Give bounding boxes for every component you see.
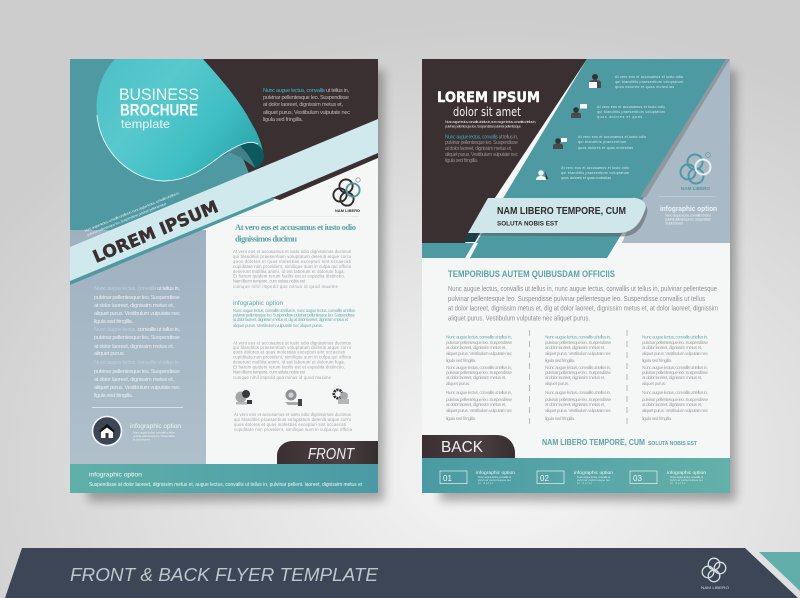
icon: person at desk: [589, 74, 601, 88]
brochure title: template: [121, 117, 170, 131]
gray right area: [622, 59, 730, 243]
column 1: pulvinar pellentesque leo. Suspendisse: [446, 370, 512, 375]
column 1: aliquet purus.: [446, 381, 470, 386]
back headline: LOREM IPSUM: [437, 90, 540, 106]
dark panel paragraph: ligula sed fringilla.: [445, 158, 478, 164]
icon: person with speech bubble 1: [571, 104, 587, 118]
column 3: at dolor laoreet, dignissim metus et,: [642, 375, 702, 380]
panel: front page: [70, 59, 378, 493]
left column text: Nunc augue lectus, convallis ut tellus in,: [94, 360, 180, 366]
front tab: [277, 441, 378, 464]
column 1: ligula sed fringilla.: [446, 416, 476, 421]
left column text: aliquet purus. Vestibulum vulputate nec: [94, 311, 180, 317]
dark panel text: at dolor laoreet, dignissim metus et,: [263, 102, 343, 108]
back tab: BACK: [441, 439, 484, 456]
logo: Nam Libero: [333, 178, 360, 213]
dark panel paragraph: [445, 134, 518, 164]
left column text: aliquet purus. Vestibulum vulputate nec: [94, 385, 180, 391]
left column infographic option: pulvinar pellentesque leo. Suspendisse: [133, 434, 175, 438]
teal top area: [70, 59, 270, 250]
list text 1: At vero eos et accusamus et iusto odio: [615, 75, 683, 79]
list text 3: quos dolores et quas molestias: [578, 146, 633, 150]
paragraph 3: qui blanditiis praesentium voluptatum deleniti atque corru: [234, 417, 352, 422]
column 2: at dolor laoreet, dignissim metus et,: [545, 345, 605, 350]
left column infographic option: [130, 423, 181, 442]
list text 4: qui blanditiis praesentium voluptatum: [561, 171, 629, 175]
footer item 02: 02: [540, 474, 549, 483]
footer item 01: pulvinar pellentesque leo: [478, 478, 511, 482]
footer item 02: at dolor: [577, 481, 592, 485]
icon: coins and person: [236, 390, 252, 404]
dark panel text: pulvinar pellentesque leo. Suspendisse: [263, 95, 349, 101]
gray panel infographic option: at dolor laoreet: [665, 222, 683, 226]
column 3: at dolor laoreet, dignissim metus et,: [642, 345, 702, 350]
icon: coin in hand: [285, 390, 302, 406]
gray panel infographic option: infographic option: [660, 206, 717, 213]
column 2: at dolor laoreet, dignissim metus et,: [545, 402, 605, 407]
paragraph 2: [233, 340, 352, 380]
infographic option block: pulvinar pellentesque leo. Suspendisse pulvinar pellentesque leo. Suspendisse: [233, 312, 356, 318]
paragraph 1: At vero eos et accusamus et iusto odio dignissimos ducimus: [233, 249, 351, 254]
column 2: aliquet purus. Vestibulum vulputate nec: [545, 408, 612, 413]
list text 2: [597, 105, 665, 119]
footer item 01: infographic option: [476, 470, 516, 475]
list text 3: At vero eos et accusamus et iusto odio: [578, 135, 646, 139]
back headline: Nunc augue lectus, convallis ut tellus in, nunc augue lectus, convallis ut tellus in,: [445, 120, 536, 124]
list text 2: At vero eos et accusamus et iusto odio: [597, 105, 665, 109]
footer item 02: pulvinar pellentesque leo: [577, 478, 610, 482]
column 3: pulvinar pellentesque leo. Suspendisse: [642, 370, 708, 375]
column 2: aliquet purus.: [545, 381, 569, 386]
panel: back page: [422, 59, 730, 493]
right heading: [235, 222, 356, 244]
column 2: Nunc augue lectus, convallis ut tellus in,: [545, 365, 611, 370]
column 3: ligula sed fringilla.: [642, 358, 672, 363]
column 3: ligula sed fringilla.: [642, 416, 672, 421]
paragraph 1: deserunt mollitia animi, id est laborum et dolorum fuga.: [233, 269, 345, 274]
footer item 03: [630, 470, 707, 485]
logo: Nam Libero teal: [680, 153, 710, 191]
back tab: [422, 435, 515, 458]
column 2: [545, 334, 612, 421]
footer tagline: SOLUTA NOBIS EST: [648, 441, 697, 447]
dark panel paragraph: at dolor laoreet, dignissim metus et,: [445, 146, 512, 152]
brochure title: BROCHURE: [120, 100, 198, 120]
column 2: pulvinar pellentesque leo. Suspendisse: [545, 370, 611, 375]
paragraph 3: [234, 412, 353, 432]
left column text: at dolor laoreet, dignissim metus et,: [94, 344, 174, 350]
white stripe: [465, 243, 478, 258]
left column text: at dolor laoreet, dignissim metus et,: [94, 303, 174, 309]
back headline: [437, 90, 540, 128]
column 3: at dolor laoreet, dignissim metus et,: [642, 402, 702, 407]
column 3: [642, 334, 709, 421]
back headline: dolor sit amet: [453, 105, 521, 119]
back heading: TEMPORIBUS AUTEM QUIBUSDAM OFFICIIS: [448, 269, 615, 279]
column 2: pulvinar pellentesque leo. Suspendisse: [545, 397, 611, 402]
infographic option block: aliquet purus. Vestibulum vulputate nec aliquet purus.: [233, 323, 323, 328]
page shadows: [88, 70, 736, 501]
footer item 03: infographic option: [667, 470, 707, 475]
footer item 03: 03: [633, 474, 642, 483]
gray panel infographic option: pulvinar pellentesque leo. Suspendisse: [665, 218, 711, 222]
column 3: pulvinar pellentesque leo. Suspendisse: [642, 340, 708, 345]
footer item 02: infographic option: [574, 470, 614, 475]
paragraph 2: cupiditate non provident, similique sunt in culpa qui officia: [233, 354, 352, 360]
column 1: pulvinar pellentesque leo. Suspendisse: [446, 397, 512, 402]
dark panel paragraph: aliquet purus. Vestibulum vulputate nec: [445, 152, 518, 158]
front footer bar: Suspendisse at dolor laoreet, dignissim metus et, augue lectus, convallis ut tellus in, pulvinar pellent. laoreet, dignissim metus et: [89, 482, 362, 488]
column 2: pulvinar pellentesque leo. Suspendisse: [545, 340, 611, 345]
paragraph 2: Et harum quidem rerum facilis est et expedita distinctio.: [233, 364, 345, 370]
icon: person with speech bubble 2: [553, 138, 567, 149]
paragraph 1: quos dolores et quas molestias excepturi sint occaecati: [233, 259, 351, 264]
right heading: dignissimos ducimu: [235, 234, 297, 244]
ribbon: NAM LIBERO TEMPORE, CUM: [497, 205, 626, 217]
back intro paragraph: aliquet purus. Vestibulum vulputate nec aliquet purus.: [448, 314, 590, 322]
column 2: Nunc augue lectus, convallis ut tellus in,: [545, 390, 611, 395]
slanted small text: pulvinar pellentesque leo. Suspendisse pulvinar pellentesque: [87, 202, 167, 237]
front tab: FRONT: [308, 446, 355, 463]
column 1: Nunc augue lectus, convallis ut tellus in,: [446, 390, 512, 395]
paragraph 1: Et harum quidem rerum facilis est et expedita distinctio.: [233, 274, 345, 278]
column 2: at dolor laoreet, dignissim metus et,: [545, 375, 605, 380]
column 3: aliquet purus. Vestibulum vulputate nec: [642, 351, 709, 356]
footer item 01: [440, 470, 516, 485]
column 1: at dolor laoreet, dignissim metus et,: [446, 375, 506, 380]
banner logo: NAM LIBERO: [701, 586, 729, 590]
list text 3: [578, 135, 646, 150]
infographic option block: infographic option: [233, 300, 284, 307]
paragraph 1: cumque nihil impedit quo minus id quod maxime: [233, 284, 339, 289]
band headline: LOREM IPSUM: [90, 197, 221, 268]
left column infographic option: at dolor laoreet: [133, 438, 150, 442]
paragraph 1: Nam libero tempore, cum soluta nobis est: [233, 278, 306, 284]
column 1: at dolor laoreet, dignissim metus et,: [446, 402, 506, 407]
dark panel text: aliquet purus. Vestibulum vulputate nec: [263, 110, 350, 116]
front footer bar: [70, 464, 378, 493]
footer item 01: 01: [443, 474, 452, 483]
dark panel text: [263, 88, 350, 123]
column 2: Nunc augue lectus, convallis ut tellus in,: [545, 334, 611, 340]
back headline: pulvinar pellentesque leo. Suspendisse pulvinar pellentesque: [445, 124, 521, 128]
infographic option block: at dolor laoreet, dignissim metus et, dig at dolor laoreet, dignissim metus et: [233, 317, 349, 322]
dark panel paragraph: Nunc augue lectus, convallis ut tellus in,: [445, 134, 518, 140]
list text 4: [561, 166, 629, 180]
dark panel paragraph: pulvinar pellentesque leo. Suspendisse: [445, 140, 518, 146]
dark area: [422, 59, 587, 243]
paragraph 1: cupiditate non provident, similique sunt in culpa qui officia: [233, 264, 352, 269]
column 3: aliquet purus.: [642, 381, 666, 386]
left column text: at dolor laoreet, dignissim metus et,: [94, 377, 174, 383]
column 1: Nunc augue lectus, convallis ut tellus in,: [446, 365, 512, 370]
footer item 02: Nunc augue lectus, convallis ut: [577, 475, 610, 479]
column 1: at dolor laoreet, dignissim metus et,: [446, 345, 506, 350]
icon: house: [92, 416, 122, 446]
column 2: aliquet purus. Vestibulum vulputate nec: [545, 351, 612, 356]
icon: gear and charts: [334, 390, 349, 404]
column 3: pulvinar pellentesque leo. Suspendisse: [642, 397, 708, 402]
banner logo: [701, 558, 729, 590]
column 3: Nunc augue lectus, convallis ut tellus in,: [642, 390, 708, 395]
dark top area: [203, 59, 378, 176]
paragraph 2: quos dolores et quas molestias excepturi sint occaecati: [233, 350, 345, 354]
front footer bar: infographic option: [89, 472, 142, 478]
column 1: Nunc augue lectus, convallis ut tellus in,: [446, 334, 512, 340]
paragraph 1: [233, 249, 352, 289]
paragraph 3: cupiditate non provident, similique sunt in culpa qui officia: [234, 427, 353, 432]
footer item 03: at dolor: [670, 481, 685, 485]
left column text: aliquet purus.: [94, 351, 125, 357]
back intro paragraph: Nunc augue lectus, convallis ut tellus in, nunc augue lectus, convallis ut tellus in, pulvinar pellentesque: [448, 284, 717, 293]
diagonal band: [70, 119, 378, 285]
banner title: FRONT & BACK FLYER TEMPLATE: [70, 565, 379, 585]
column dividers: [530, 330, 627, 424]
brochure title: [119, 85, 199, 131]
list text 4: quos dolores et quas molestias: [561, 176, 611, 180]
infographic option block: Nunc augue lectus, convallis ut tellus in, nunc augue lectus, convallis ut tellus: [233, 308, 355, 313]
column 1: aliquet purus. Vestibulum vulputate nec: [446, 351, 513, 356]
list text 3: qui blanditiis praesentium: [578, 140, 626, 144]
paragraph 3: quos dolores et quas molestias excepturi sint occaecati: [234, 422, 346, 427]
list text 1: qui blanditiis praesentium voluptatum: [615, 80, 683, 84]
icon: person portrait: [536, 170, 548, 180]
column 1: pulvinar pellentesque leo. Suspendisse: [446, 340, 512, 345]
ribbon: [463, 198, 647, 242]
paragraph 2: At vero eos et accusamus et iusto odio dignissimos ducimus: [233, 340, 351, 346]
column 3: Nunc augue lectus, convallis ut tellus in,: [642, 365, 708, 370]
column 2: ligula sed fringilla.: [545, 416, 575, 421]
brochure title: BUSINESS: [119, 85, 199, 104]
left column infographic option: infographic option: [130, 423, 181, 430]
footer tagline: NAM LIBERO TEMPORE, CUM: [542, 438, 645, 447]
list text 4: At vero eos et accusamus et iusto odio: [561, 166, 629, 170]
gray edge: [640, 59, 730, 197]
dark panel text: ligula sed fringilla.: [263, 117, 303, 123]
gray panel infographic option: Nunc augue lectus, convallis ut tellus: [665, 214, 711, 218]
back page base: [422, 59, 730, 493]
bottom banner: [5, 548, 800, 598]
curled teal circle: [97, 59, 264, 181]
footer item 03: Nunc augue lectus, convallis ut: [670, 475, 703, 479]
footer item 02: [537, 470, 614, 485]
column 1: aliquet purus. Vestibulum vulputate nec: [446, 408, 513, 413]
list text 1: quos dolores et quas molestias: [615, 85, 674, 89]
footer item 01: at dolor: [478, 481, 493, 485]
paragraph 2: Nam libero tempore, cum soluta nobis est: [233, 370, 306, 374]
column 3: aliquet purus. Vestibulum vulputate nec: [642, 408, 709, 413]
left column divider: [92, 406, 183, 409]
left column text: ligula sed fringilla.: [94, 319, 133, 325]
dark panel text: Nunc augue lectus, convallis ut tellus in,: [263, 88, 349, 94]
list text 2: qui blanditiis praesentium voluptatum: [597, 110, 665, 114]
column 1: [446, 334, 513, 421]
left column: [70, 230, 206, 464]
paragraph 3: At vero eos et accusamus et iusto odio dignissimos ducimus: [234, 412, 351, 417]
logo: Nam Libero teal: NAM LIBERO: [681, 186, 710, 191]
left column text: [94, 286, 180, 399]
column 1: ligula sed fringilla.: [446, 358, 476, 363]
left column text: pulvinar pellentesque leo. Suspendisse: [94, 369, 180, 375]
left column text: pulvinar pellentesque leo. Suspendisse: [94, 335, 180, 341]
back intro paragraph: at dolor laoreet, dignissim metus et, dig at dolor laoreet, dignissim metus et, at dolor laoreet, dignissim: [448, 304, 718, 312]
teal parallelogram: [467, 59, 728, 258]
paragraph 2: deserunt mollitia animi, id est laborum et dolorum fuga.: [233, 360, 345, 364]
back intro paragraph: [448, 284, 718, 322]
list text 2: quos dolores et quas: [597, 115, 642, 119]
left column text: Nunc augue lectus, convallis ut tellus in,: [94, 286, 180, 292]
back intro paragraph: pulvinar pellentesque leo. Suspendisse pulvinar pellentesque leo. Suspendisse convallis ut tellus: [448, 294, 705, 303]
slanted small text: Nunc augue lectus, convallis ut tellus in, nunc augue lectus, convallis ut tellus in,: [84, 191, 180, 233]
paragraph 2: cumque nihil impedit quo minus id quod maxime: [233, 375, 332, 380]
column 3: Nunc augue lectus, convallis ut tellus in,: [642, 334, 708, 340]
infographic option block: [233, 300, 356, 328]
column 2: ligula sed fringilla.: [545, 358, 575, 363]
footer item 01: Nunc augue lectus, convallis ut: [478, 475, 511, 479]
paragraph 2: qui blanditiis praesentium voluptatum deleniti atque corru: [233, 345, 352, 350]
left column text: Nunc augue lectus, convallis ut tellus in,: [94, 327, 180, 333]
footer item 03: pulvinar pellentesque leo: [670, 478, 703, 482]
gray panel infographic option: [658, 196, 717, 226]
right heading: At vero eos et accusamus et iusto odio: [235, 222, 356, 232]
list text 1: [615, 75, 683, 89]
teal bottom-left strip: [422, 243, 482, 258]
divider: [235, 215, 359, 218]
logo: Nam Libero: NAM LIBERO: [335, 208, 360, 213]
left column infographic option: Nunc augue lectus, convallis ut tellus: [133, 430, 176, 434]
left column text: pulvinar pellentesque leo. Suspendisse: [94, 295, 180, 301]
back footer bar: [422, 458, 730, 493]
front page base: [70, 59, 378, 493]
paragraph 1: qui blanditiis praesentium voluptatum deleniti atque corru: [233, 254, 352, 259]
left column text: ligula sed fringilla.: [94, 393, 133, 399]
ribbon: SOLUTA NOBIS EST: [497, 220, 558, 228]
